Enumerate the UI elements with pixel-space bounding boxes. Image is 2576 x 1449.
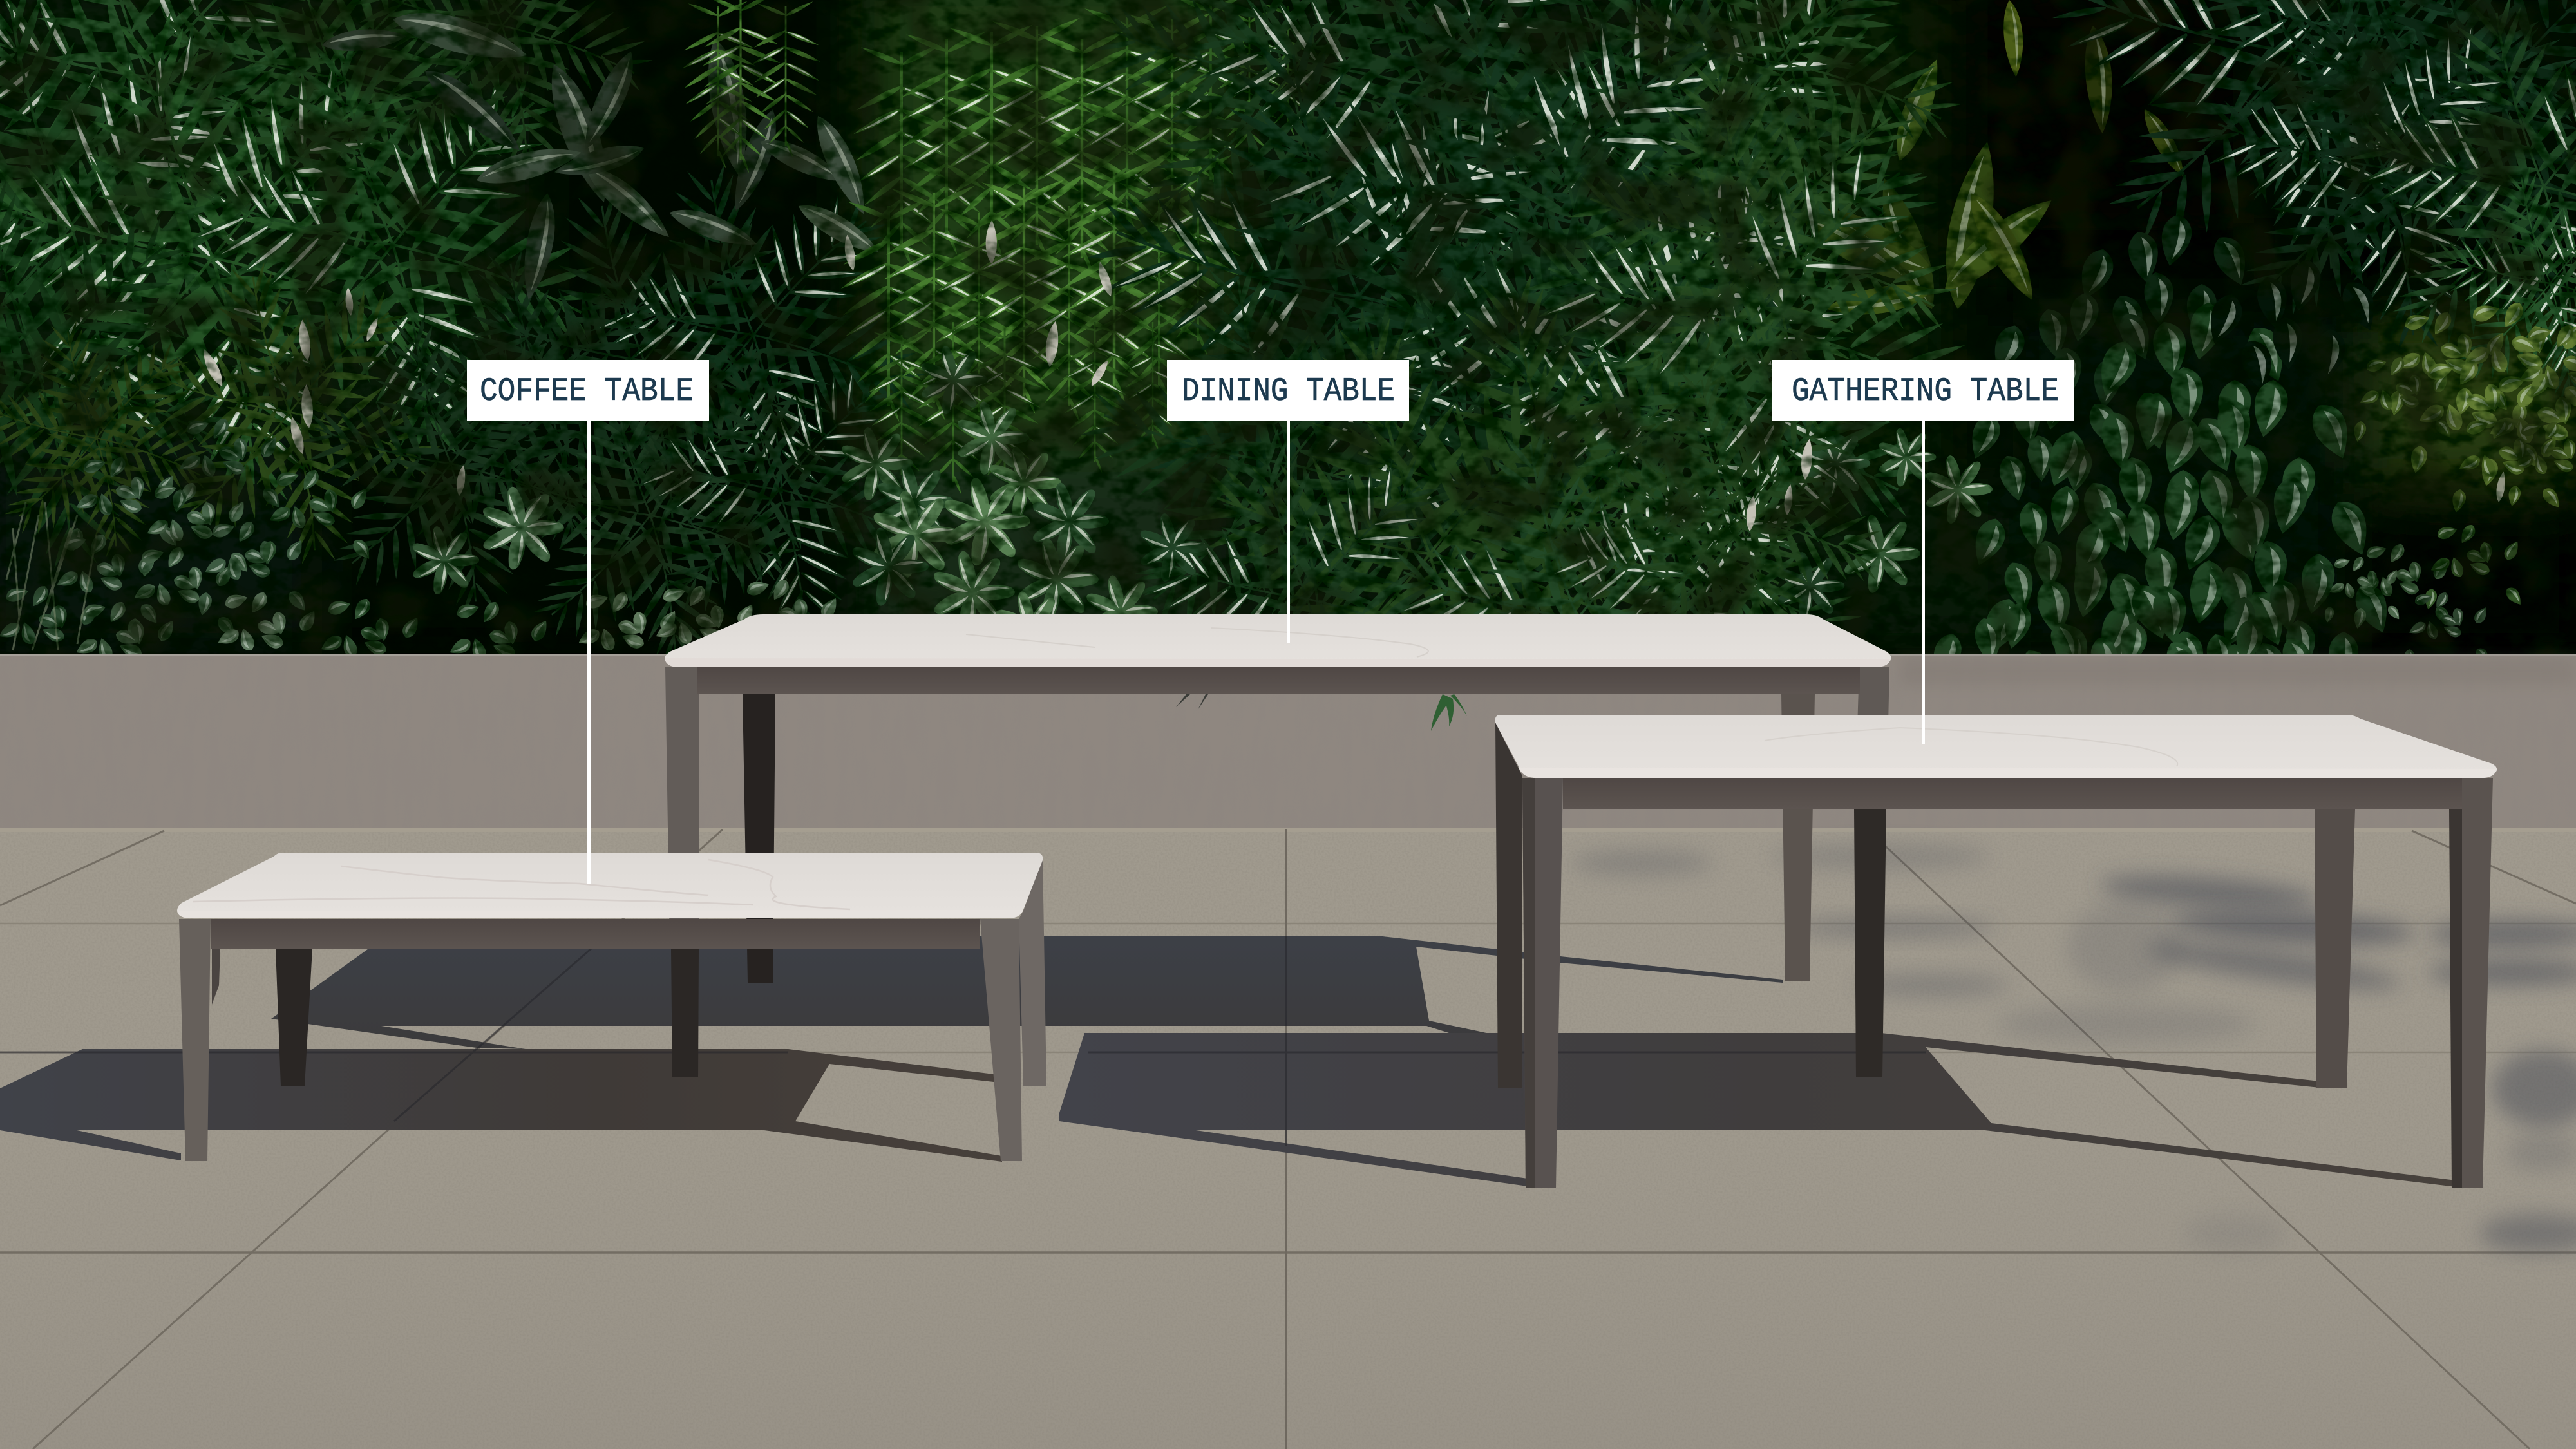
foliage: small-leaf vines lower left bbox=[0, 416, 845, 697]
foliage: white peace lily blooms bbox=[198, 220, 2506, 531]
foliage: olive broad leaves upper right bbox=[1508, 0, 2192, 679]
plant sprig under dining table bbox=[1176, 694, 1467, 731]
concrete retaining wall bbox=[0, 654, 2576, 831]
gathering table bbox=[1495, 715, 2497, 1188]
foliage: palm fronds left bbox=[0, 0, 943, 679]
gathering table marble top bbox=[1495, 715, 2497, 778]
label text: coffee table: COFFEE TABLE bbox=[480, 374, 694, 410]
coffee table bbox=[177, 853, 1046, 1161]
paving ground with tile joints bbox=[0, 828, 2576, 1449]
foliage: central palm fronds bbox=[1068, 0, 1958, 829]
foliage: striped broad leaves bbox=[321, 1, 885, 302]
dining table legs bbox=[665, 667, 1889, 1077]
coffee table legs bbox=[179, 857, 1046, 1161]
gathering table apron bbox=[1563, 778, 2462, 809]
label text: dining table: DINING TABLE bbox=[1182, 374, 1395, 410]
table cast shadows bbox=[0, 936, 2456, 1187]
label text: gathering table: GATHERING TABLE bbox=[1792, 374, 2059, 410]
dining table apron bbox=[697, 667, 1860, 694]
background: living plant wall bbox=[0, 0, 2576, 829]
gathering table legs bbox=[1495, 723, 2493, 1188]
foliage: hanging green ferns bbox=[681, 0, 1318, 496]
dappled leaf shadows on ground bbox=[1571, 844, 2576, 1253]
foliage: bright olive shrub right bbox=[2323, 299, 2576, 668]
dining table marble top bbox=[665, 614, 1891, 667]
dining table bbox=[665, 614, 1891, 1077]
label: gathering table bbox=[1772, 360, 2074, 744]
foliage: umbrella plant clusters bbox=[410, 345, 1993, 666]
label: dining table bbox=[1167, 360, 1409, 643]
coffee table apron bbox=[211, 919, 980, 949]
coffee table marble top bbox=[177, 853, 1043, 918]
label: coffee table bbox=[467, 360, 709, 884]
foliage: heart-shaped climbing leaves bbox=[1926, 212, 2398, 742]
foliage: palm fronds upper right bbox=[2038, 0, 2576, 412]
